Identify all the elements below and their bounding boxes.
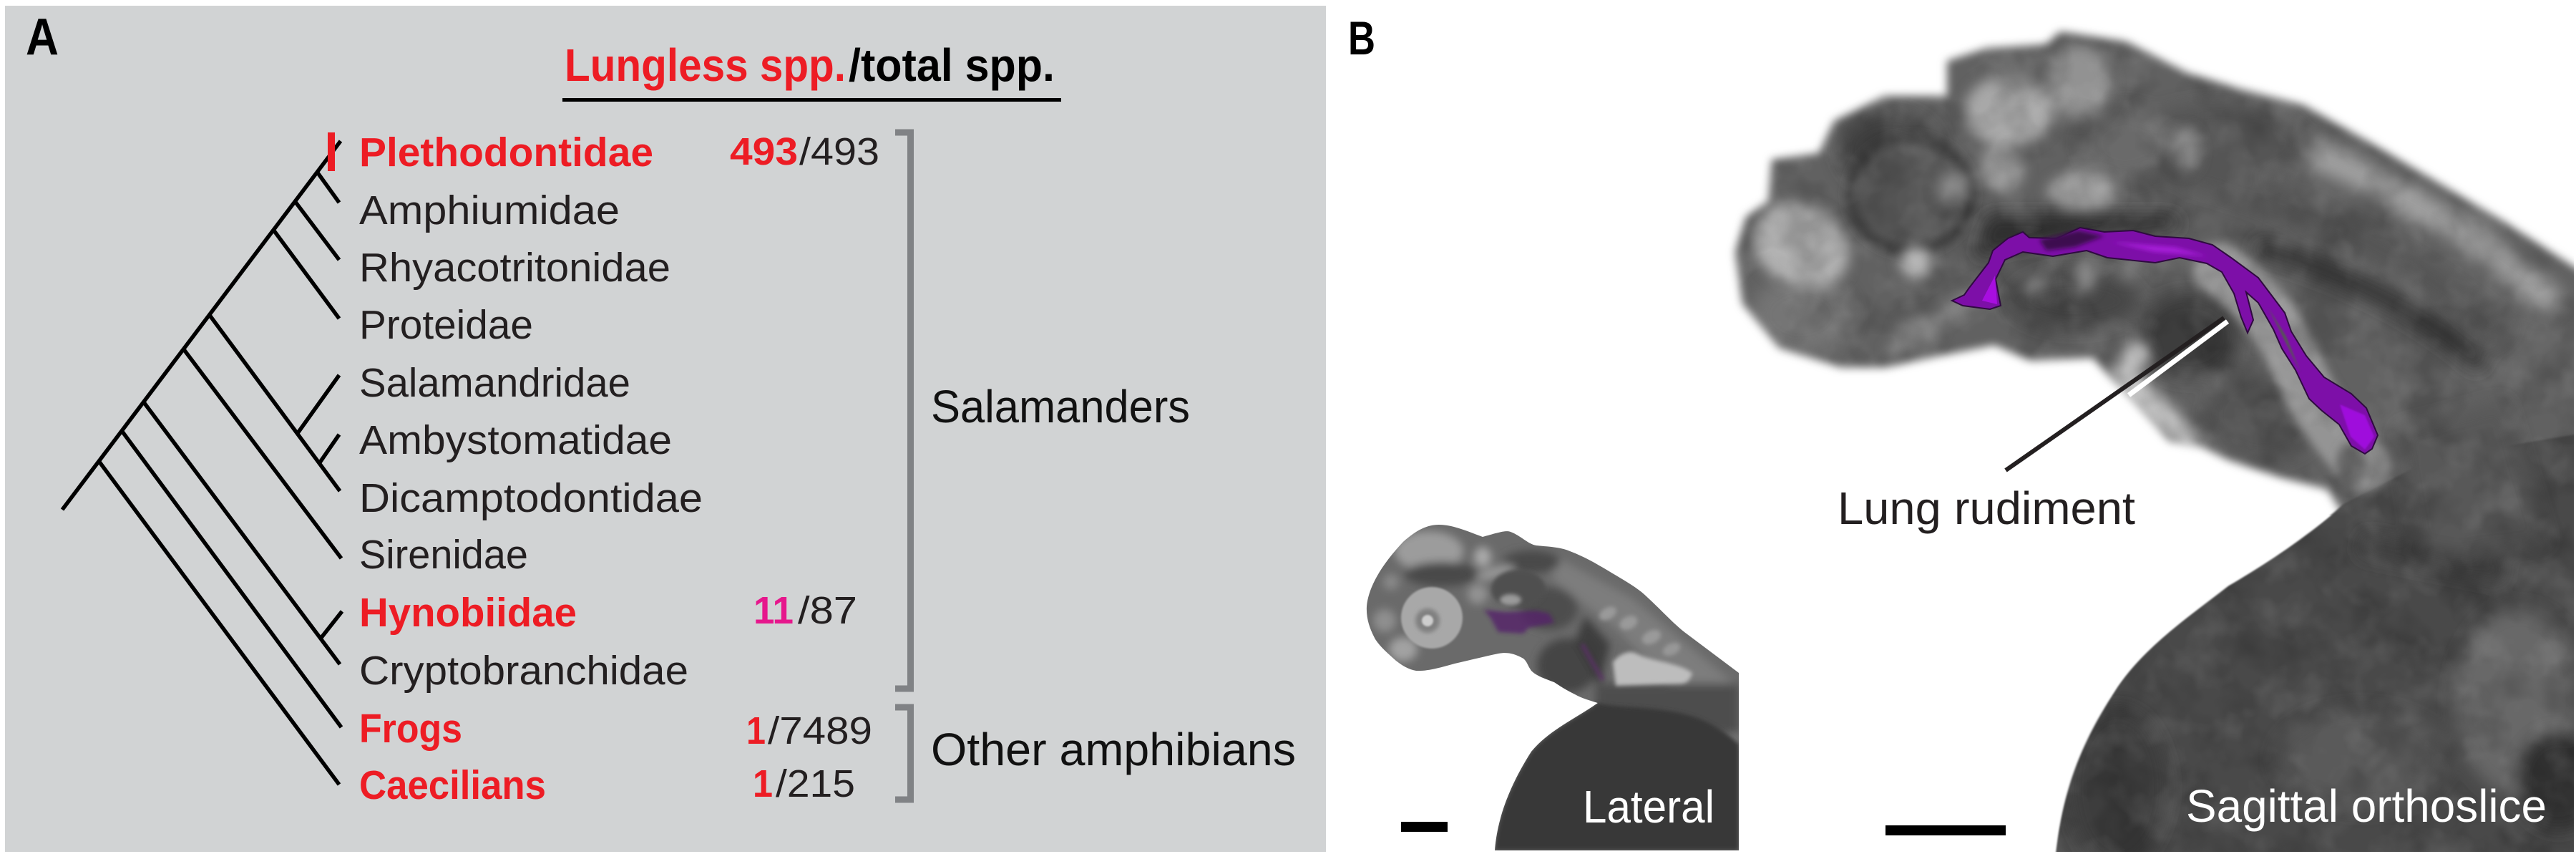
icon: faint lung rudiment overlay xyxy=(1484,610,1603,680)
family names: Dicamptodontidae xyxy=(359,475,703,521)
column heading: lungless spp. / total spp.: Lungless spp. xyxy=(565,39,846,91)
label: other amphibians: Other amphibians xyxy=(931,724,1296,775)
label: salamanders: Salamanders xyxy=(931,381,1190,432)
red marker: loss of lungs in Plethodontidae xyxy=(328,132,335,171)
label: sagittal orthoslice: Sagittal orthoslice xyxy=(2186,780,2547,832)
family names: Cryptobranchidae xyxy=(359,648,688,694)
eye xyxy=(1850,139,1971,251)
species counts: /493 xyxy=(799,130,879,173)
panel label A: A xyxy=(26,9,59,66)
family names: Hynobiidae xyxy=(359,590,577,636)
species counts: /7489 xyxy=(768,709,872,752)
light channel around lung xyxy=(2218,268,2365,465)
eye xyxy=(1401,587,1463,649)
pointer line to lung rudiment xyxy=(2006,318,2228,470)
otic vesicle xyxy=(1491,570,1546,608)
family names: Salamandridae xyxy=(359,360,630,406)
species counts: 493 xyxy=(730,130,798,173)
species counts: /215 xyxy=(776,762,855,805)
species counts: 11 xyxy=(753,589,794,632)
phylogenetic tree xyxy=(62,141,342,785)
column heading: lungless spp. / total spp. xyxy=(562,39,1061,102)
column heading: lungless spp. / total spp.: /total spp. xyxy=(849,39,1055,91)
bracket: other amphibians xyxy=(895,707,910,800)
yolk xyxy=(1495,703,1739,850)
species counts: /87 xyxy=(798,589,857,632)
lateral embryo image xyxy=(1360,519,1739,852)
scale bar: lateral xyxy=(1401,822,1448,832)
base tone xyxy=(1717,14,2576,515)
bracket: salamanders xyxy=(895,132,910,689)
family names xyxy=(359,130,703,808)
family names: Caecilians xyxy=(359,762,546,808)
sagittal orthoslice image xyxy=(1717,14,2576,854)
icon: purple lung rudiment xyxy=(1952,228,2378,454)
family names: Ambystomatidae xyxy=(359,417,672,463)
species counts: 1 xyxy=(753,762,773,805)
heart xyxy=(1613,652,1692,686)
family names: Proteidae xyxy=(359,302,533,348)
label: lateral: Lateral xyxy=(1583,781,1714,833)
trunk and yolk xyxy=(2055,430,2576,854)
family names: Rhyacotritonidae xyxy=(359,245,670,291)
family names: Amphiumidae xyxy=(359,188,620,233)
species counts xyxy=(730,130,879,805)
label: lung rudiment: Lung rudiment xyxy=(1838,482,2135,534)
family names: Sirenidae xyxy=(359,532,528,578)
species counts: 1 xyxy=(746,709,766,752)
family names: Frogs xyxy=(359,706,462,752)
panel B: embryo images xyxy=(1348,11,2576,854)
scale bar: sagittal xyxy=(1885,825,2006,835)
panel label B: B xyxy=(1348,11,1375,64)
panel A: amphibian phylogeny xyxy=(5,6,1326,852)
family names: Plethodontidae xyxy=(359,130,653,175)
